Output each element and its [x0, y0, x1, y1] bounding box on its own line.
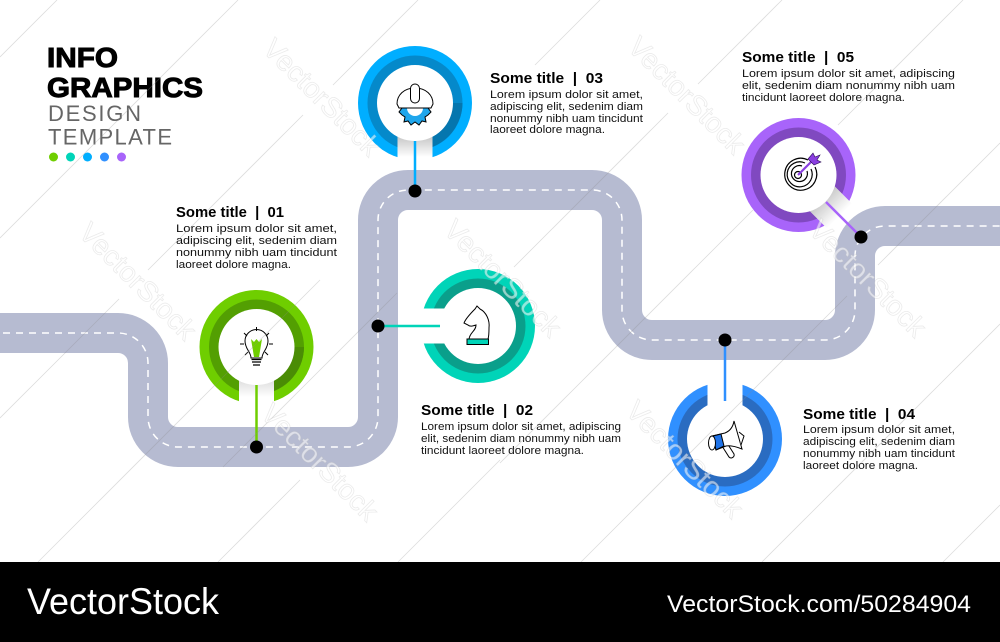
- text: step 03: nonummy nibh uam tincidunt: [490, 113, 643, 125]
- text: step 04: Some title | 04: [803, 406, 916, 423]
- colour dots: [49, 152, 126, 162]
- step 02 connector: [372, 320, 440, 332]
- text: step 05: Some title | 05: [742, 49, 854, 66]
- footer logo: VectorStock: [27, 581, 219, 622]
- icon: megaphone: [708, 421, 744, 458]
- title: INFO: [47, 42, 118, 73]
- footer image id: VectorStock.com/50284904: [667, 591, 971, 618]
- watermark text: VectorStock: [803, 214, 933, 344]
- watermark text: VectorStock: [622, 31, 752, 161]
- text: step 04: adipiscing elit, sedenim diam: [803, 436, 955, 448]
- text: step 04: laoreet dolore magna.: [803, 460, 918, 472]
- text: step 03: [490, 70, 643, 136]
- road centre dashes: [0, 190, 1000, 447]
- watermark text: VectorStock: [255, 398, 385, 528]
- text: step 04: nonummy nibh uam tincidunt: [803, 448, 955, 460]
- text: step 03: Some title | 03: [490, 70, 603, 87]
- text: step 01: [176, 204, 337, 271]
- text: step 01: adipiscing elit, sedenim diam: [176, 235, 337, 247]
- text: step 01: nonummy nibh uam tincidunt: [176, 247, 337, 259]
- text: step 03: Lorem ipsum dolor sit amet,: [490, 89, 643, 101]
- text: step 03: adipiscing elit, sedenim diam: [490, 101, 643, 113]
- text: step 04: Lorem ipsum dolor sit amet,: [803, 424, 955, 436]
- icon: dartboard: [785, 153, 821, 190]
- footer bar: [0, 562, 1000, 642]
- step 05 connector: [826, 202, 868, 244]
- step 03 connector: [408, 141, 422, 198]
- text: step 02: Lorem ipsum dolor sit amet, adipiscing: [421, 421, 621, 433]
- text: step 01: Lorem ipsum dolor sit amet,: [176, 223, 337, 235]
- watermark text: [73, 31, 933, 528]
- text: step 05: elit, sedenim diam nonummy nibh uam: [742, 80, 955, 92]
- watermark text: VectorStock: [257, 33, 387, 163]
- road: [0, 190, 1000, 447]
- text: step 04: [803, 406, 955, 472]
- title: TEMPLATE: [48, 124, 172, 150]
- watermark text: VectorStock: [620, 395, 750, 525]
- title: DESIGN: [48, 101, 141, 126]
- step 05 ring: [742, 118, 856, 232]
- watermark text: VectorStock: [438, 214, 568, 344]
- step 04 connector: [718, 334, 732, 401]
- step 02 ring: [420, 269, 535, 383]
- text: step 01: Some title | 01: [176, 204, 284, 221]
- icon: light bulb: [240, 327, 273, 365]
- step 04 ring: [668, 381, 782, 496]
- step 03 ring: [358, 46, 472, 161]
- title: [47, 42, 203, 150]
- text: step 05: Lorem ipsum dolor sit amet, adipiscing: [742, 68, 955, 80]
- text: step 02: tincidunt laoreet dolore magna.: [421, 445, 584, 457]
- text: step 05: tincidunt laoreet dolore magna.: [742, 92, 905, 104]
- icon: helmet and gear: [397, 84, 433, 125]
- title: GRAPHICS: [47, 72, 203, 103]
- text: step 02: Some title | 02: [421, 402, 533, 419]
- step 01 connector: [250, 385, 263, 454]
- watermark text: VectorStock: [73, 217, 203, 347]
- text: step 02: [421, 402, 621, 457]
- text: step 05: [742, 49, 955, 104]
- text: step 03: laoreet dolore magna.: [490, 124, 605, 136]
- text: step 02: elit, sedenim diam nonummy nibh uam: [421, 433, 621, 445]
- step 01 ring: [200, 290, 314, 405]
- text: step 01: laoreet dolore magna.: [176, 259, 291, 271]
- icon: chess knight: [464, 306, 489, 344]
